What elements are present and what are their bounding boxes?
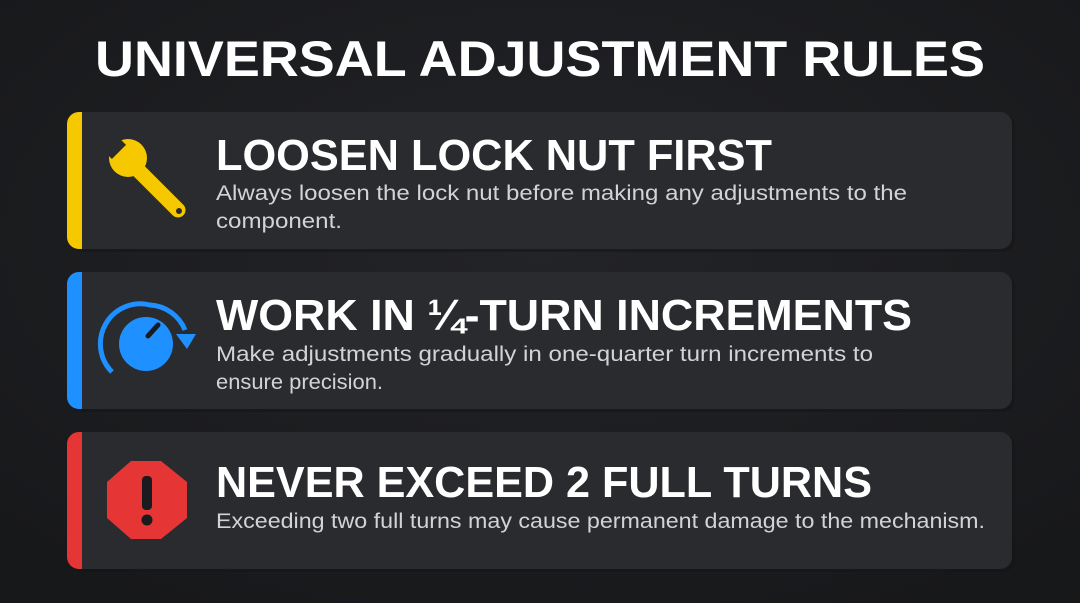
body text: Exceeding two full turns may cause permanent damage to the mechanism.	[216, 510, 985, 533]
icon: wrench	[102, 135, 182, 214]
body text: ensure precision.	[216, 371, 383, 394]
body text	[216, 343, 873, 394]
body text	[216, 182, 907, 233]
title: UNIVERSAL ADJUSTMENT RULES	[95, 31, 985, 87]
panel: never exceed	[67, 432, 1015, 572]
panel: quarter turn	[67, 272, 1015, 412]
icon: stop warning	[107, 461, 187, 539]
body text: Make adjustments gradually in one-quarter turn increments to	[216, 343, 873, 366]
heading: WORK IN ¼-TURN INCREMENTS	[216, 291, 912, 340]
panel: loosen lock nut	[67, 112, 1015, 252]
heading: LOOSEN LOCK NUT FIRST	[216, 131, 772, 180]
body text: component.	[216, 210, 342, 233]
icon: dial	[100, 304, 196, 372]
heading: NEVER EXCEED 2 FULL TURNS	[216, 458, 872, 507]
body text: Always loosen the lock nut before making any adjustments to the	[216, 182, 907, 205]
